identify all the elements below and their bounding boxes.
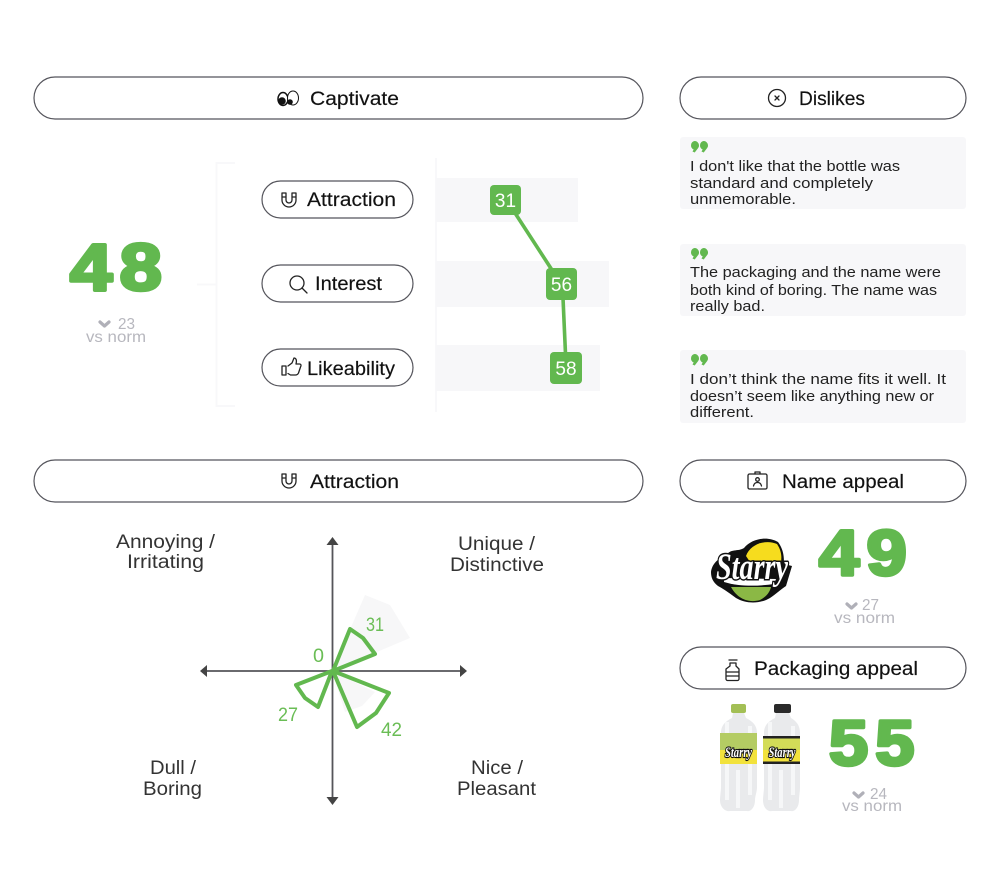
label: dull boring: Dull / — [150, 758, 197, 779]
score: packaging appeal 55 — [829, 708, 922, 815]
image: black cap bottle — [763, 704, 800, 811]
quote card 1: I don't like that the bottle was — [690, 159, 900, 175]
quote card 3: doesn’t seem like anything new or — [690, 389, 934, 405]
petal: dull boring — [296, 671, 332, 707]
image: black cap bottle: Starry — [768, 745, 796, 761]
value: 27: 27 — [278, 705, 298, 726]
panel: packaging appeal heading — [680, 647, 966, 689]
quote card 1 — [680, 137, 966, 209]
quote card 3: I don’t think the name fits it well. It — [690, 372, 946, 388]
icon: magnet — [282, 474, 296, 488]
panel: packaging appeal heading: Packaging appeal — [754, 659, 918, 680]
icon: down chevron — [100, 322, 109, 326]
icon: magnet — [282, 193, 296, 207]
label: dull boring — [143, 758, 202, 800]
icon: magnifier — [290, 276, 307, 293]
quote card 2: really bad. — [690, 299, 765, 315]
icon: down chevron — [854, 793, 863, 797]
quote card 3: different. — [690, 405, 754, 421]
petal: unique distinctive — [333, 629, 375, 671]
axes — [200, 537, 467, 805]
score: name appeal 49: vs norm — [834, 610, 895, 627]
bar: likeability — [436, 345, 600, 391]
bracket connector — [197, 158, 436, 412]
pill: likeability: Likeability — [307, 359, 396, 380]
label: nice pleasant — [457, 758, 537, 800]
panel: captivate heading: Captivate — [310, 89, 399, 110]
value: 31: 31 — [366, 615, 384, 636]
chart: attraction quadrant chart — [200, 537, 467, 805]
icon: quote mark — [691, 354, 708, 366]
label: dull boring: Boring — [143, 779, 202, 800]
quote card 2: The packaging and the name were — [690, 265, 941, 281]
pill: likeability — [262, 349, 413, 386]
value: 31: 31 — [495, 191, 516, 212]
quote card 2: both kind of boring. The name was — [690, 283, 937, 299]
score: captivate 48: 23 — [118, 316, 135, 333]
panel: attraction heading: Attraction — [310, 472, 399, 493]
petal: nice pleasant — [333, 671, 389, 727]
pill: attraction: Attraction — [307, 190, 396, 211]
score: captivate 48 — [70, 232, 169, 346]
pill: attraction — [262, 181, 413, 218]
image: lime bottle — [720, 704, 757, 811]
value: 0: 0 — [313, 646, 324, 667]
value: 58 — [550, 352, 582, 384]
label: unique distinctive: Unique / — [458, 534, 536, 555]
label: nice pleasant: Nice / — [471, 758, 524, 779]
panel: captivate heading — [34, 77, 643, 119]
bar: attraction — [436, 178, 578, 222]
score: name appeal 49 — [819, 518, 914, 627]
label: annoying irritating: Annoying / — [116, 532, 216, 553]
value: 42: 42 — [381, 720, 402, 741]
score: packaging appeal 55: vs norm — [842, 798, 902, 815]
score: captivate 48: vs norm — [86, 329, 146, 346]
icon: quote mark — [691, 248, 708, 260]
value: 58: 58 — [555, 359, 577, 380]
icon: bottle — [726, 660, 739, 680]
image: lime bottle: Starry — [725, 745, 752, 761]
label: annoying irritating — [116, 532, 216, 573]
pill: interest — [262, 265, 413, 302]
icon: thumbs up — [282, 358, 301, 375]
score: name appeal 49: 49 — [819, 518, 914, 589]
connector line — [515, 213, 566, 354]
icon: quote mark — [691, 141, 708, 152]
panel: name appeal heading — [680, 460, 966, 502]
score: name appeal 49: 27 — [862, 597, 879, 614]
quote card 1: unmemorable. — [690, 192, 796, 208]
chart: captivate slope chart — [436, 178, 609, 391]
label: nice pleasant: Pleasant — [457, 779, 537, 800]
panel: name appeal heading: Name appeal — [782, 472, 904, 493]
value: 56 — [546, 268, 577, 300]
label: unique distinctive — [450, 534, 544, 576]
label: annoying irritating: Irritating — [127, 552, 204, 573]
background wedge lower — [332, 671, 375, 712]
panel: dislikes heading: Dislikes — [799, 89, 865, 110]
pill: interest: Interest — [315, 274, 383, 295]
value: 56: 56 — [551, 275, 572, 296]
value: 31 — [490, 185, 521, 215]
score: packaging appeal 55: 24 — [870, 786, 887, 803]
panel: dislikes heading — [680, 77, 966, 119]
logo: starry: Starry — [716, 547, 788, 588]
icon: down chevron — [847, 604, 856, 608]
quote card 1: standard and completely — [690, 176, 874, 192]
background wedge — [332, 595, 410, 671]
bar: interest — [436, 261, 609, 307]
label: unique distinctive: Distinctive — [450, 555, 544, 576]
quote card 3 — [680, 350, 966, 423]
icon: eyes — [278, 91, 298, 106]
logo: starry — [711, 539, 792, 602]
score: packaging appeal 55: 55 — [829, 708, 922, 779]
score: captivate 48: 48 — [70, 232, 169, 305]
icon: x in circle — [768, 90, 786, 106]
panel: attraction heading — [34, 460, 643, 502]
quote card 2 — [680, 244, 966, 316]
icon: id badge — [748, 472, 767, 489]
